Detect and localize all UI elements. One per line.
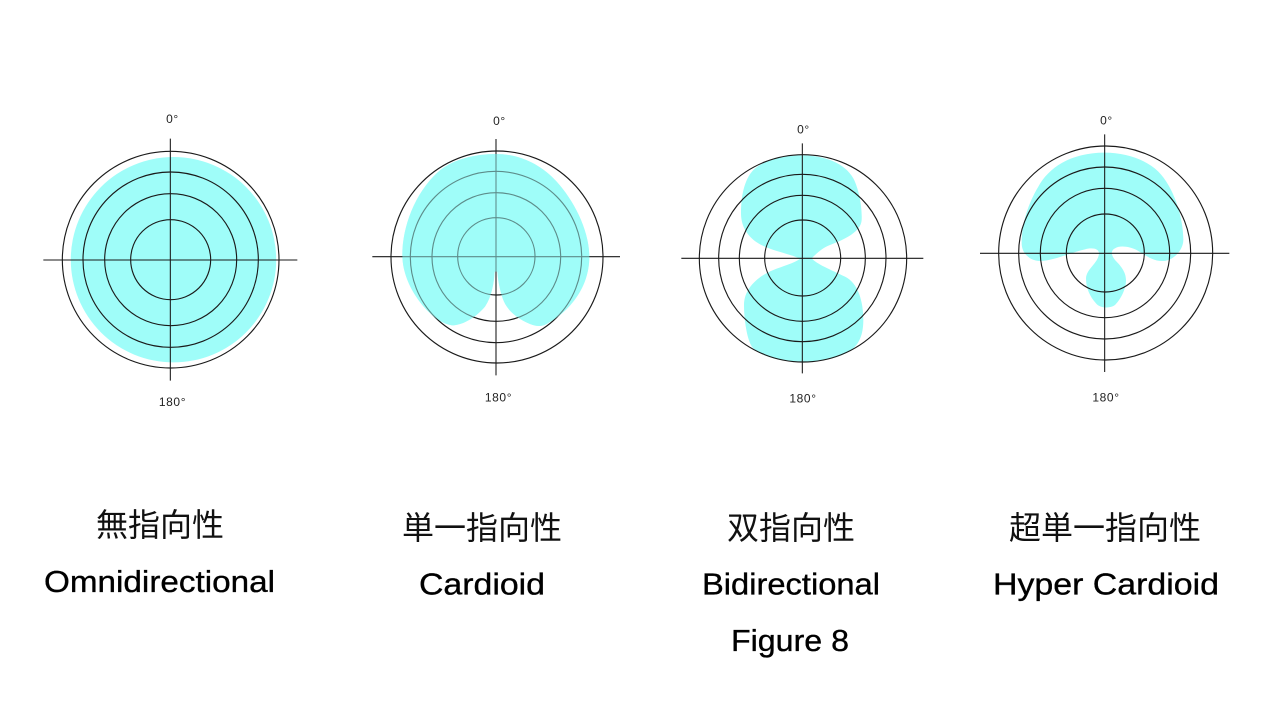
pickup area tint over the grid: cardioid (402, 154, 589, 326)
label: 180 degrees: 180° (789, 392, 817, 406)
heading: bidirectional, Japanese: 双指向性 (727, 510, 855, 546)
heading: hyper cardioid, Japanese: 超単一指向性 (1009, 510, 1201, 546)
pickup area: figure 8 (741, 155, 863, 362)
heading: omnidirectional, Japanese: 無指向性 (96, 507, 224, 543)
heading: cardioid, English: Cardioid (419, 566, 545, 602)
pickup area: hyper cardioid (1022, 153, 1183, 307)
label: 180 degrees: 180° (159, 395, 186, 409)
panel: bidirectional polar chart (681, 122, 923, 406)
heading: bidirectional, English: Bidirectional (702, 566, 880, 602)
polar grid: figure 8 (681, 143, 923, 373)
label: 0 degrees: 0° (1100, 113, 1113, 127)
heading: cardioid, Japanese: 単一指向性 (402, 510, 562, 546)
polar grid: cardioid (372, 139, 620, 375)
panel: cardioid polar chart (372, 114, 620, 404)
heading: figure 8: Figure 8 (731, 623, 849, 658)
polar grid: hyper cardioid (980, 134, 1229, 372)
polar grid: omnidirectional (43, 139, 297, 381)
label: 0 degrees: 0° (493, 114, 506, 128)
label: 0 degrees: 0° (797, 122, 810, 136)
label: 0 degrees: 0° (166, 112, 179, 126)
label: 180 degrees: 180° (1092, 390, 1120, 404)
panel: hyper cardioid polar chart (980, 113, 1229, 405)
pickup area: cardioid (402, 154, 589, 326)
pickup area: omnidirectional (71, 157, 276, 362)
heading: hyper cardioid, English: Hyper Cardioid (993, 566, 1219, 602)
heading: omnidirectional, English: Omnidirectional (44, 564, 275, 599)
panel: omnidirectional polar chart (43, 112, 297, 409)
label: 180 degrees: 180° (485, 390, 512, 404)
